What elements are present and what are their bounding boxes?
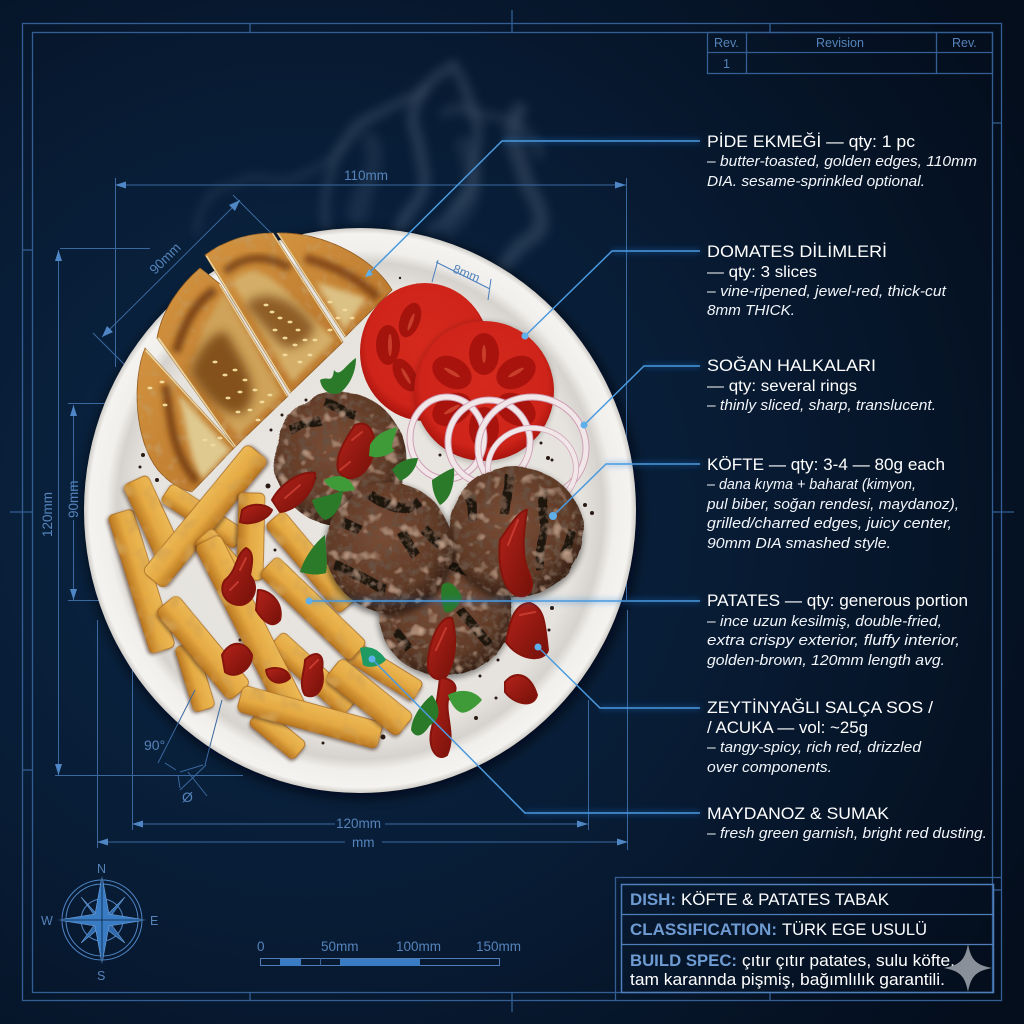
title row: dish: DISH: — [630, 890, 676, 909]
callout: kofte: grilled/charred edges, juicy center, — [707, 516, 952, 532]
revision table: Rev. — [714, 36, 739, 50]
patty bottom — [377, 551, 513, 679]
callout: patates: extra crispy exterior, fluffy interior, — [707, 633, 960, 649]
dimension: 110mm: 110mm — [344, 168, 388, 183]
angle mark 90°: Ø — [182, 789, 193, 805]
fry back 6 — [344, 641, 424, 701]
pepper specks — [138, 277, 594, 744]
angle mark 90° — [144, 690, 222, 805]
compass rose: E — [150, 914, 158, 928]
fry right — [265, 510, 357, 614]
fry back 5 — [248, 707, 307, 760]
callout: sogan: — qty: several rings — [707, 378, 857, 395]
callout texts — [706, 132, 987, 842]
callout: sos: – tangy-spicy, rich red, drizzled — [706, 740, 922, 756]
fry bottom right — [324, 657, 414, 737]
title row: build spec: tam karannda pişmiş, bağımlılık garantili. — [630, 970, 945, 989]
french fries — [108, 443, 424, 760]
fry lower left — [155, 594, 251, 701]
fry upright — [237, 493, 265, 580]
dimension: mm bottom: mm — [352, 835, 374, 850]
callout: kofte: pul biber, soğan rendesi, maydanoz), — [706, 497, 959, 513]
callout: domates: – vine-ripened, jewel-red, thick-cut — [706, 284, 947, 300]
dimension: 120mm bottom: 120mm — [336, 816, 381, 831]
pide wedge 1 — [277, 233, 392, 337]
tomato slice back — [360, 283, 490, 421]
scale bar: 50mm — [321, 939, 359, 954]
callout: kofte: KÖFTE — qty: 3-4 — 80g each — [707, 455, 945, 474]
fry bottom long — [236, 685, 384, 749]
fry left small — [194, 527, 249, 588]
fry back 3 — [160, 483, 246, 549]
callout: pide: DIA. sesame-sprinkled optional. — [707, 174, 925, 190]
callout: sos — [706, 698, 933, 776]
dimension: 90mm left: 90mm — [66, 480, 81, 518]
patty centre — [324, 484, 454, 616]
pide wedge 3 — [157, 268, 288, 447]
title row: build spec: BUILD SPEC: — [630, 951, 737, 970]
pide bread — [137, 233, 392, 492]
patties — [274, 392, 584, 679]
onion rings — [410, 397, 586, 508]
dimension: 8mm: 8mm — [451, 262, 482, 285]
angle mark 90°: 90° — [144, 737, 165, 753]
leader glow — [308, 141, 700, 813]
callout: sogan: SOĞAN HALKALARI — [707, 356, 876, 375]
callout: pide: PİDE EKMEĞİ — qty: 1 pc — [707, 132, 916, 151]
dimension: 8mm — [432, 260, 491, 300]
sesame seeds — [148, 301, 354, 446]
scale bar — [257, 939, 521, 966]
callout: pide: – butter-toasted, golden edges, 110mm — [706, 154, 977, 170]
pide wedge 4 — [137, 348, 235, 492]
fry back 7 — [267, 631, 358, 717]
callout: sos: over components. — [707, 760, 832, 776]
title row: build spec: çıtır çıtır patates, sulu köfte, — [742, 951, 955, 970]
title row: classification: CLASSIFICATION: — [630, 920, 777, 939]
callout: pide — [706, 132, 977, 190]
callout: domates — [706, 242, 947, 319]
patty right — [448, 469, 584, 601]
tomato slice front — [414, 321, 554, 463]
fry short — [259, 556, 367, 661]
callout: sogan — [706, 356, 936, 414]
title row: classification — [630, 920, 927, 939]
title row: dish: KÖFTE & PATATES TABAK — [681, 890, 890, 909]
compass rose: N — [97, 862, 106, 876]
callout: domates: — qty: 3 slices — [707, 264, 817, 281]
callout: kofte — [706, 455, 959, 552]
scale bar: 0 — [257, 939, 265, 954]
callout: maydanoz — [706, 804, 987, 842]
revision table: Rev. — [952, 36, 977, 50]
revision table — [707, 32, 992, 74]
callout: kofte: – dana kıyma + baharat (kimyon, — [706, 477, 916, 493]
dimension: 90mm diagonal: 90mm — [147, 240, 184, 277]
compass rose — [41, 862, 158, 983]
callout: sos: ZEYTİNYAĞLI SALÇA SOS / — [707, 698, 933, 717]
callout: sogan: – thinly sliced, sharp, translucent. — [706, 398, 936, 414]
callout: patates: – ince uzun kesilmiş, double-fried, — [706, 614, 942, 630]
callout: patates: PATATES — qty: generous portion — [707, 591, 968, 610]
dimension: 120mm left: 120mm — [40, 492, 55, 537]
callout: maydanoz: MAYDANOZ & SUMAK — [707, 804, 890, 823]
fry back 4 — [174, 641, 216, 713]
title row: classification: TÜRK EGE USULÜ — [782, 920, 927, 939]
compass rose: W — [41, 914, 53, 928]
scale bar: 150mm — [476, 939, 521, 954]
revision table: Revision — [816, 36, 864, 50]
steam — [200, 70, 540, 265]
fry long centre — [195, 534, 308, 722]
fry back — [108, 508, 175, 654]
leader lines with callouts — [306, 141, 700, 813]
revision table: 1 — [723, 57, 730, 71]
callout: maydanoz: – fresh green garnish, bright red dusting. — [706, 826, 987, 842]
tomato slices — [360, 283, 554, 463]
fry back 2 — [123, 474, 184, 566]
callout: sos: / ACUKA — vol: ~25g — [707, 718, 868, 737]
scale bar: 100mm — [396, 939, 441, 954]
leader paths — [309, 141, 700, 813]
fry main diagonal — [142, 443, 269, 589]
callout: domates: 8mm THICK. — [707, 303, 795, 319]
patty top left — [274, 392, 406, 526]
pide wedge 2 — [205, 233, 343, 393]
sparkle icon — [944, 944, 992, 992]
callout: kofte: 90mm DIA smashed style. — [707, 536, 891, 552]
sauce — [222, 424, 548, 757]
title row: build spec — [630, 951, 955, 989]
compass rose: S — [97, 969, 105, 983]
callout: patates — [706, 591, 968, 669]
leader end dots — [306, 269, 588, 662]
title block — [616, 878, 1001, 1000]
dimension lines lower — [97, 260, 628, 850]
dimension lines under food — [40, 168, 628, 850]
plate — [84, 228, 636, 793]
plate shadow — [84, 230, 640, 798]
callout: patates: golden-brown, 120mm length avg. — [707, 653, 945, 669]
callout: domates: DOMATES DİLİMLERİ — [707, 242, 887, 261]
parsley garnish — [300, 358, 482, 735]
